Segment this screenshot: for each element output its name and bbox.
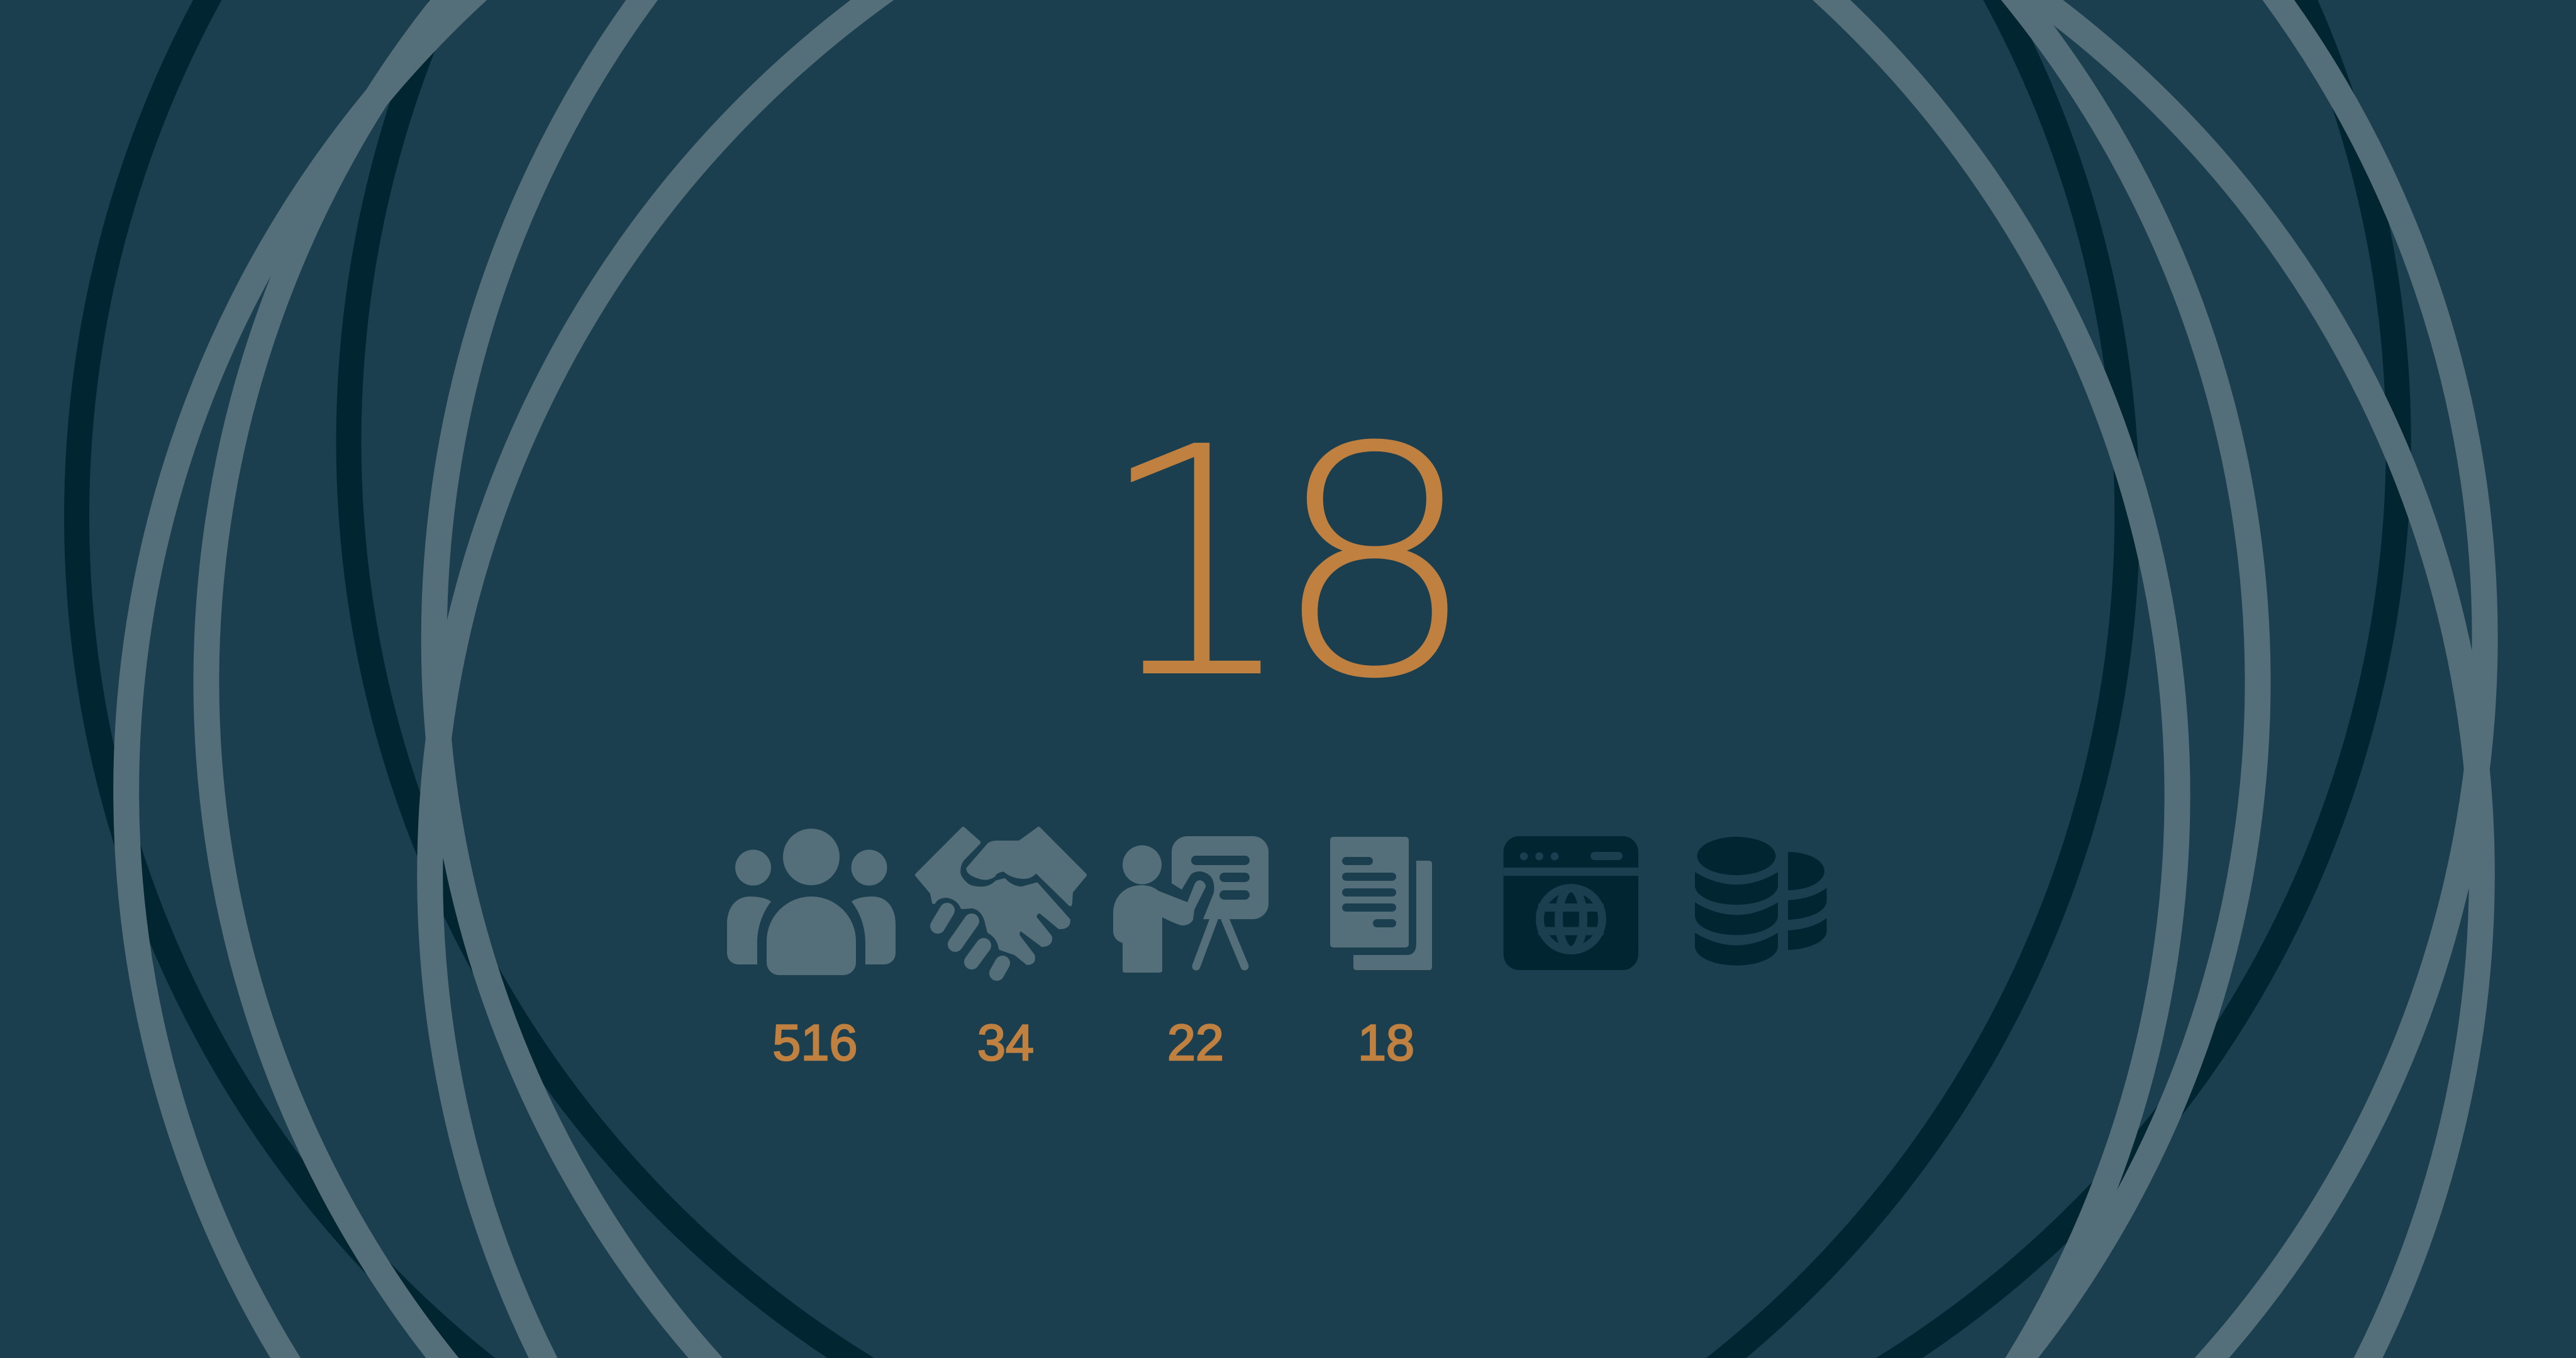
icon: browser with globe — [1504, 836, 1638, 970]
stat numbers — [772, 1015, 1414, 1071]
icon: coin stacks — [1695, 837, 1826, 966]
big number: 1 — [1096, 380, 1297, 748]
stat numbers: 34 — [977, 1015, 1034, 1071]
stat numbers: 516 — [772, 1015, 858, 1071]
icon: documents — [1330, 837, 1432, 970]
icon: handshake — [917, 829, 1085, 973]
stat numbers: 18 — [1358, 1015, 1414, 1071]
icon: presenter — [1113, 836, 1269, 973]
icon: people — [727, 829, 896, 975]
stat numbers: 22 — [1167, 1015, 1224, 1071]
big number: 8 — [1271, 380, 1479, 748]
big number — [1096, 380, 1479, 748]
